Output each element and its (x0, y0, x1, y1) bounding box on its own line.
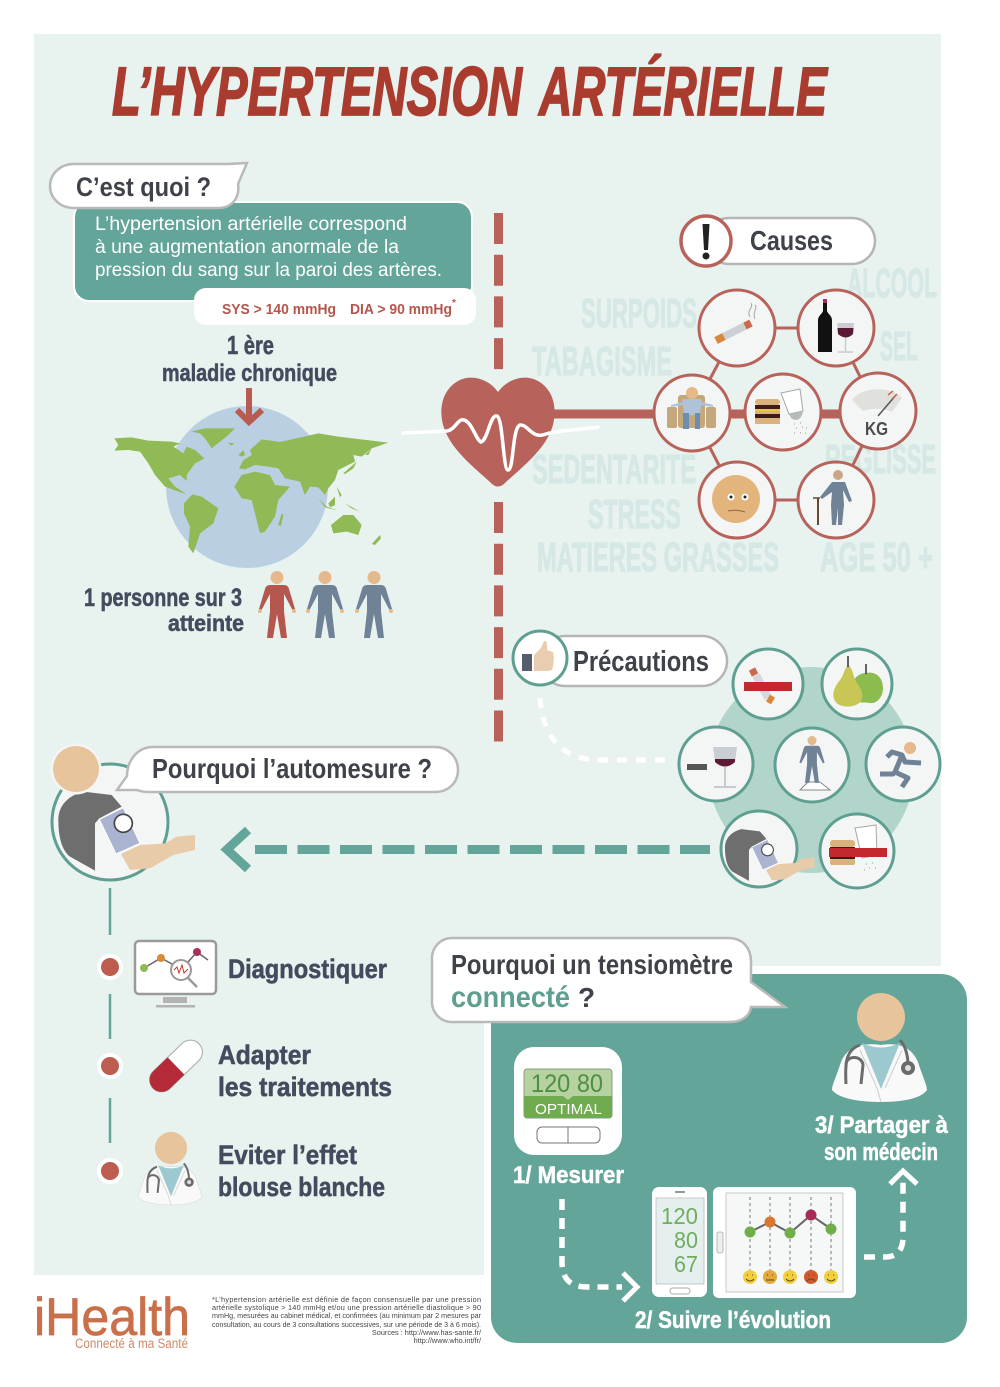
icon: tablet with chart (713, 1187, 856, 1298)
icon: blood pressure monitor: 120 80 (531, 1070, 603, 1098)
icon: overweight scale (840, 373, 916, 449)
icon: blood pressure monitor (514, 1047, 622, 1155)
icon: phone: 67 (674, 1251, 698, 1277)
faded cause words (532, 260, 937, 580)
blood pressure thresholds: DIA > 90 mmHg (350, 301, 452, 318)
icon: fatty food and salt (745, 374, 821, 450)
faded cause words: STRESS (588, 491, 681, 537)
icon: reduce alcohol (679, 727, 753, 801)
label: step 1: 1/ Mesurer (513, 1162, 624, 1189)
globe (114, 406, 388, 568)
speech bubble: c'est quoi (50, 163, 247, 208)
icon: reduce fat and salt (820, 814, 894, 888)
footnote: http://www.who.int/fr/ (414, 1336, 482, 1345)
text: adapter les traitements (218, 1040, 392, 1102)
faded cause words: TABAGISME (532, 338, 672, 384)
panel: precautions (513, 631, 940, 888)
arrow: step 2 to step 3 (864, 1171, 917, 1257)
faded cause words: AGE 50 + (820, 534, 933, 580)
icon: fruit (822, 649, 892, 719)
icon: affected person (258, 571, 296, 638)
icon: unaffected person (355, 571, 393, 638)
speech bubble: pourquoi un tensiometre connecte (432, 938, 785, 1022)
definition text box (74, 202, 472, 301)
icon: alcohol (798, 290, 874, 366)
heart connector (545, 410, 850, 418)
title: L’HYPERTENSION (112, 53, 523, 130)
icon: monitor with chart (135, 941, 216, 1008)
icon: doctor large (832, 993, 927, 1102)
heading: first chronic disease: maladie chronique (162, 360, 337, 387)
speech bubble: pourquoi un tensiometre connecte: connecté (451, 981, 570, 1014)
icon: blood pressure monitor: OPTIMAL (535, 1101, 602, 1118)
icon: exercise runner (866, 727, 940, 801)
text: adapter les traitements: les traitements (218, 1072, 392, 1102)
precautions heading pill (540, 636, 727, 686)
label: step 3: 3/ Partager à (815, 1112, 949, 1139)
blood pressure thresholds: * (452, 298, 456, 309)
label: step 3 (815, 1112, 949, 1166)
blood pressure thresholds (194, 288, 476, 325)
text: eviter l'effet blouse blanche: blouse blanche (218, 1172, 385, 1202)
icon: phone: 120 (661, 1203, 698, 1229)
text: eviter l'effet blouse blanche (218, 1140, 385, 1202)
arrow: step 1 to step 2 (562, 1199, 637, 1301)
bullet: diagnose (97, 954, 123, 980)
heading: first chronic disease (162, 330, 337, 387)
icon: no smoking (733, 649, 803, 719)
logo: iHealth (34, 1288, 190, 1347)
definition text box: L’hypertension artérielle correspond (95, 214, 407, 235)
icon: weight control (775, 728, 849, 802)
logo: Connecté à ma Santé (75, 1336, 188, 1351)
bullet: treatments (97, 1053, 123, 1079)
icon: overweight scale: KG (865, 419, 888, 439)
statistic: one person in three: atteinte (168, 610, 244, 636)
icon: self measurement small (721, 811, 814, 887)
speech bubble: pourquoi un tensiometre connecte: ? (578, 982, 595, 1013)
icon: phone (652, 1187, 707, 1297)
panel: world statistic (84, 330, 393, 638)
faded cause words: SEL (880, 323, 918, 369)
heading: first chronic disease: 1 ère (227, 330, 274, 360)
icon: sedentary (654, 375, 730, 451)
panel: connected monitor (432, 938, 967, 1343)
bullet: white coat (97, 1158, 123, 1184)
speech bubble: pourquoi l'automesure (117, 747, 458, 792)
icon: pill (145, 1035, 207, 1097)
teal background (491, 974, 967, 1343)
arrow down to globe (237, 388, 262, 422)
hexagon connectors (692, 328, 878, 500)
icon: thumbs up (513, 631, 567, 685)
definition text box: à une augmentation anormale de la (95, 237, 399, 258)
precautions heading pill: Précautions (573, 646, 709, 678)
text: adapter les traitements: Adapter (218, 1040, 311, 1070)
text: diagnostiquer: Diagnostiquer (228, 954, 387, 984)
icon: heart with ECG (403, 378, 598, 486)
arrow: precautions to self-measurement (227, 830, 710, 869)
icon: age over fifty (798, 462, 874, 538)
blood pressure thresholds: SYS > 140 mmHg (222, 301, 336, 318)
icon: doctor small (138, 1132, 202, 1205)
faded cause words: SURPOIDS (581, 290, 697, 336)
icon: unaffected person (306, 571, 344, 638)
footnote: consultation, au cours de 3 consultations successives, sur une période de 3 à 6 mois). (212, 1320, 481, 1329)
panel: self-measurement (50, 744, 458, 1205)
icon: stress face (699, 462, 775, 538)
white dashed connector (540, 698, 673, 760)
footnote: *L’hypertension artérielle est définie de façon consensuelle par une pression (212, 1295, 481, 1304)
faded cause words: MATIERES GRASSES (537, 534, 779, 580)
icon: person measuring blood pressure (50, 744, 195, 880)
text: eviter l'effet blouse blanche: Eviter l’effet (218, 1140, 357, 1170)
definition text box: pression du sang sur la paroi des artères. (95, 260, 442, 281)
icon: phone: 80 (674, 1227, 698, 1253)
panel: causes (532, 216, 937, 580)
speech bubble: c'est quoi: C’est quoi ? (76, 172, 211, 202)
timeline connector (109, 888, 111, 1143)
footnote: artérielle systolique > 140 mmHg et/ou une pression artérielle diastolique > 90 (212, 1303, 481, 1312)
title: ARTÉRIELLE (538, 53, 828, 130)
icon: exclamation mark (681, 216, 731, 266)
label: step 2: 2/ Suivre l’évolution (635, 1307, 831, 1334)
statistic: one person in three: 1 personne sur 3 (84, 584, 242, 612)
footnote (212, 1295, 482, 1345)
icon: smoking (699, 290, 775, 366)
label: step 3: son médecin (824, 1139, 938, 1166)
causes heading pill (706, 218, 875, 264)
speech bubble: pourquoi un tensiometre connecte: Pourquoi un tensiomètre (451, 949, 733, 980)
faded cause words: SEDENTARITE (532, 446, 696, 492)
precautions background shape (708, 667, 914, 873)
speech bubble: pourquoi l'automesure: Pourquoi l’automesure ? (152, 753, 432, 784)
footnote: Sources : http://www.has-sante.fr/ (372, 1328, 482, 1337)
causes heading pill: Causes (750, 225, 833, 256)
footnote: mmHg, mesurées au cabinet médical, et confirmées (au minimum par 2 mesures par (212, 1311, 482, 1320)
statistic: one person in three (84, 584, 244, 636)
panel: definition (50, 163, 476, 325)
